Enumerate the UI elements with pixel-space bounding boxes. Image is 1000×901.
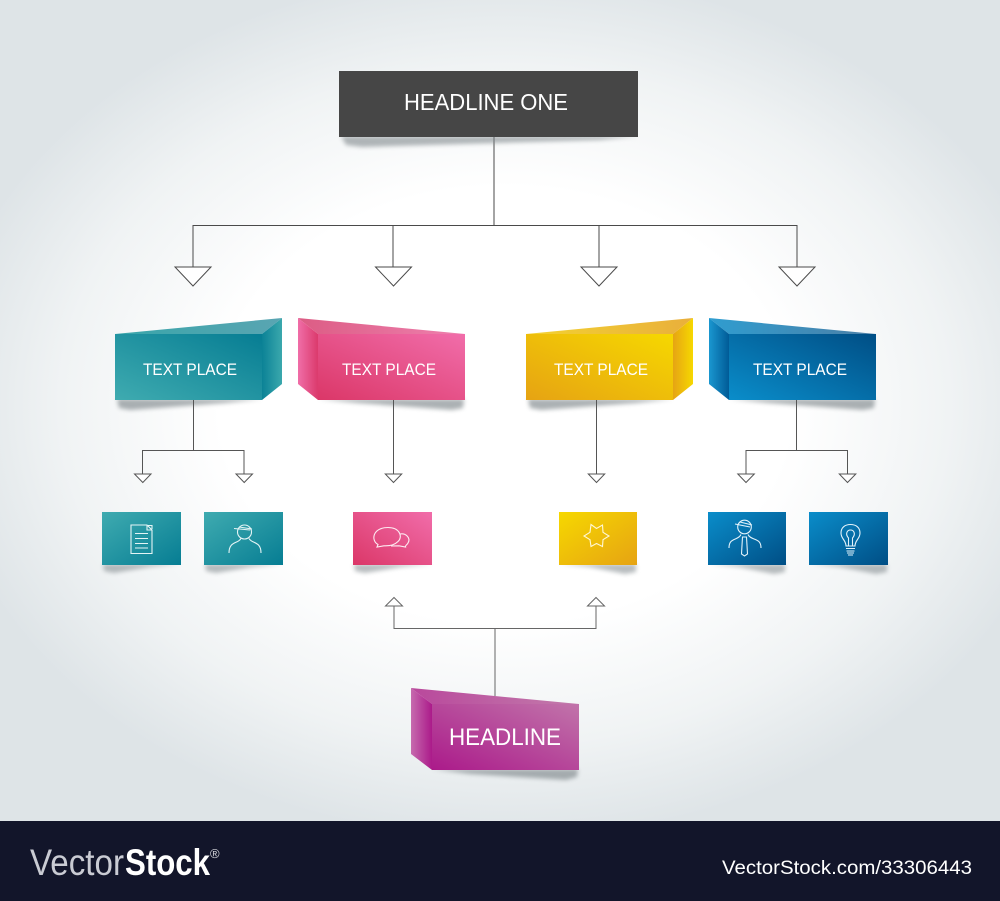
panel: pink text place: TEXT PLACE <box>342 360 436 379</box>
icon: lightbulb <box>841 524 860 555</box>
panel: star tile <box>559 512 637 574</box>
panel: teal text place <box>115 318 282 410</box>
footer logo: Vector <box>30 842 124 883</box>
icon: star <box>584 524 609 546</box>
connector: blue branch <box>738 400 856 482</box>
panel: document tile <box>102 512 181 573</box>
panel: yellow text place <box>526 318 693 410</box>
connector: teal branch <box>134 400 252 482</box>
connector: headline to lower tiles <box>386 598 604 696</box>
panel: blue text place <box>709 318 876 410</box>
panel: businessman tile <box>708 512 786 574</box>
panel: blue text place: TEXT PLACE <box>753 360 847 379</box>
panel: lightbulb tile <box>809 512 888 574</box>
footer logo: Stock <box>125 842 210 883</box>
icon: businessman <box>729 520 761 556</box>
connector: yellow branch <box>588 400 605 482</box>
registered mark: ® <box>210 846 220 861</box>
icon: speech bubbles <box>374 528 409 547</box>
panel: magenta headline <box>411 688 579 780</box>
footer logo <box>30 842 210 883</box>
footer bar <box>0 821 1000 901</box>
icon: document <box>131 525 152 554</box>
connector: top headline to four branches <box>175 137 815 286</box>
panel: magenta headline: HEADLINE <box>449 724 561 751</box>
icon: person <box>229 525 261 553</box>
panel: teal text place: TEXT PLACE <box>143 360 237 379</box>
connector: pink branch <box>385 400 402 482</box>
panel: pink text place <box>298 318 465 410</box>
panel: headline one <box>339 71 638 147</box>
panel: chat tile <box>353 512 432 573</box>
panel: yellow text place: TEXT PLACE <box>554 360 648 379</box>
panel: person tile <box>204 512 283 573</box>
panel: headline one: HEADLINE ONE <box>404 89 568 115</box>
footer image id: VectorStock.com/33306443 <box>722 858 972 879</box>
